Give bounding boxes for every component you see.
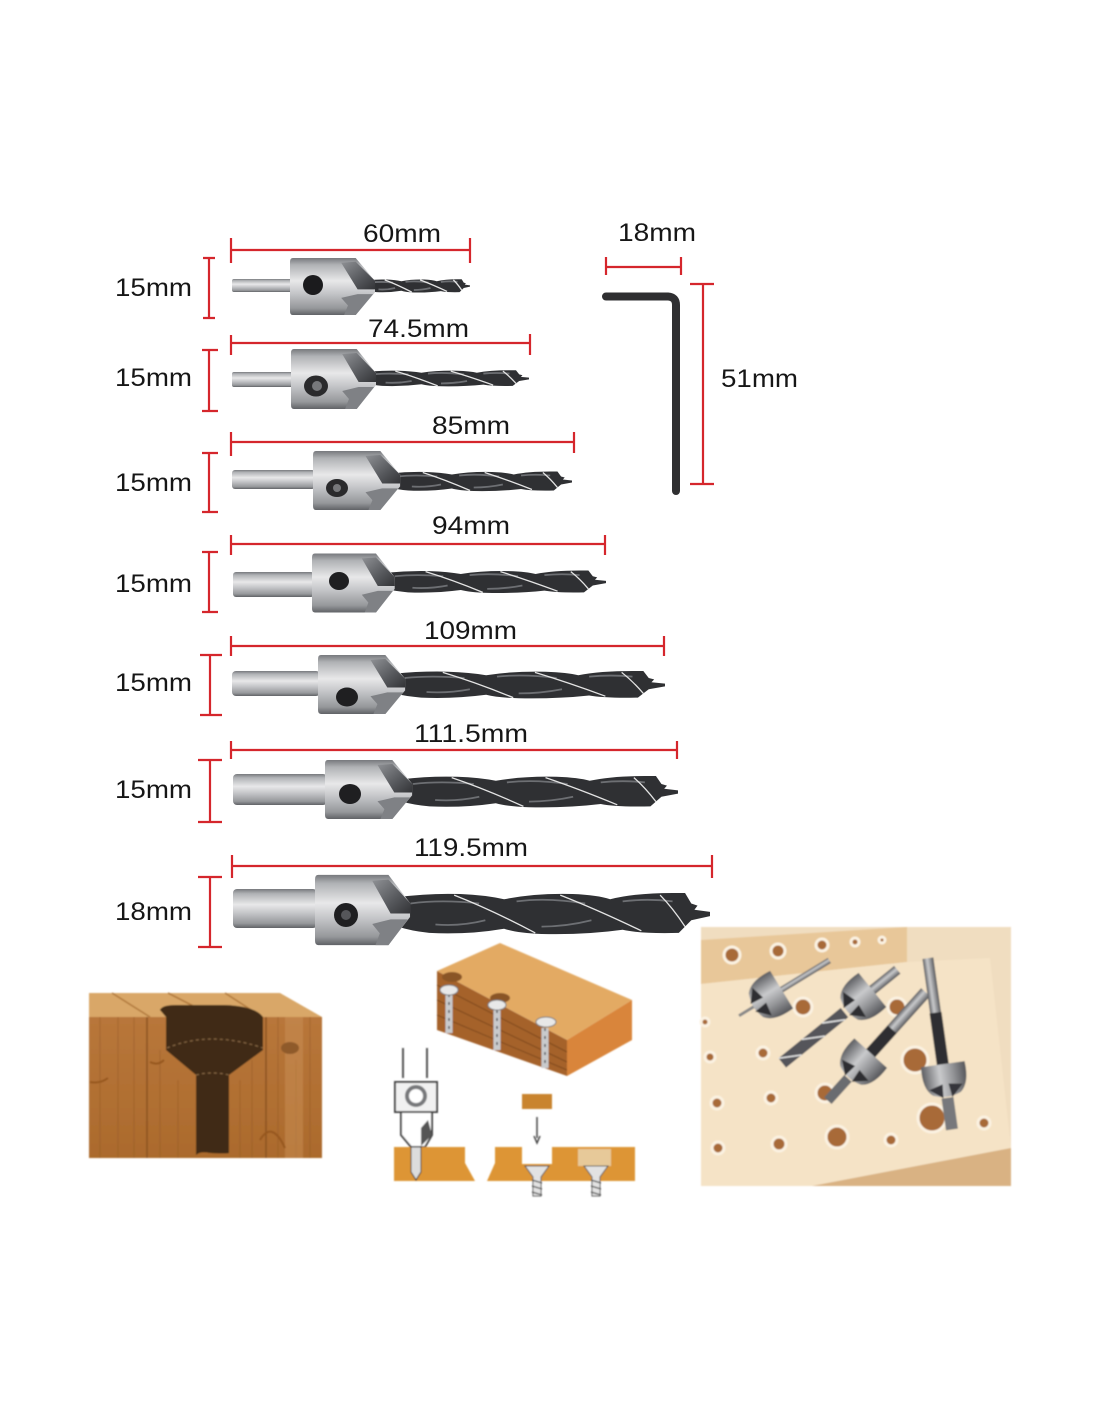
drill bit 3 <box>232 451 572 510</box>
dimension: 15mm height, bit 1: 15mm <box>115 274 192 302</box>
bit C <box>811 977 942 1116</box>
dimension: 60mm length <box>231 220 470 263</box>
dimension: 74.5mm length: 74.5mm <box>368 315 469 343</box>
photo: drill bits on drilled plywood board <box>701 927 1011 1186</box>
dimension: 109mm length: 109mm <box>424 617 517 645</box>
dimension: 109mm length <box>231 617 664 656</box>
dimension: 111.5mm length <box>231 720 677 759</box>
plug and arrow <box>522 1094 552 1143</box>
dimension: hex key 18mm width <box>606 219 696 275</box>
dimension: 74.5mm length <box>231 315 530 355</box>
drill bit 7 <box>233 875 710 945</box>
drill bit 5 <box>232 655 665 714</box>
dimension: 15mm height, bit 5 <box>115 655 222 715</box>
drill bit 1 <box>232 258 470 315</box>
drilled holes <box>701 937 990 1154</box>
dimension: 15mm height, bit 6: 15mm <box>115 776 192 804</box>
dimension: 15mm height, bit 1 <box>115 258 215 318</box>
drill bit 6 <box>233 760 678 819</box>
bit B <box>768 952 911 1080</box>
dimension: 15mm height, bit 5: 15mm <box>115 669 192 697</box>
drill bit 4 <box>233 554 606 612</box>
dimension: 94mm length <box>231 512 605 555</box>
illustration: countersunk hole in wood block <box>89 993 322 1158</box>
dimension: 18mm height, bit 7 <box>115 877 222 947</box>
bit A <box>727 941 841 1035</box>
bit D <box>906 955 974 1133</box>
dimension: 85mm length <box>231 412 574 456</box>
dimension: 15mm height, bit 4: 15mm <box>115 570 192 598</box>
dimension: 111.5mm length: 111.5mm <box>414 720 528 748</box>
screws in holes <box>525 1149 611 1196</box>
dimension: 15mm height, bit 6 <box>115 760 222 822</box>
dimension: 15mm height, bit 3 <box>115 453 218 512</box>
dimension: hex key 51mm height <box>690 284 798 484</box>
drill cross-section <box>395 1048 437 1147</box>
dimension: 15mm height, bit 2: 15mm <box>115 364 192 392</box>
dimension: 15mm height, bit 4 <box>115 552 218 612</box>
illustration: countersink usage diagram <box>394 943 635 1196</box>
dimension: 94mm length: 94mm <box>432 512 510 540</box>
wood strip with countersunk holes <box>394 1147 635 1181</box>
wood block with screws <box>437 943 632 1076</box>
icon: hex key <box>606 296 676 491</box>
dimension: 119.5mm length: 119.5mm <box>414 834 528 862</box>
dimension: 119.5mm length <box>232 834 712 878</box>
dimension: hex key 18mm width: 18mm <box>618 219 696 247</box>
dimension: 85mm length: 85mm <box>432 412 510 440</box>
dimension: hex key 51mm height: 51mm <box>721 365 798 393</box>
dimension: 15mm height, bit 3: 15mm <box>115 469 192 497</box>
drill bit 2 <box>232 349 529 409</box>
dimension: 60mm length: 60mm <box>363 220 441 248</box>
dimension: 18mm height, bit 7: 18mm <box>115 898 192 926</box>
dimension: 15mm height, bit 2 <box>115 350 218 411</box>
